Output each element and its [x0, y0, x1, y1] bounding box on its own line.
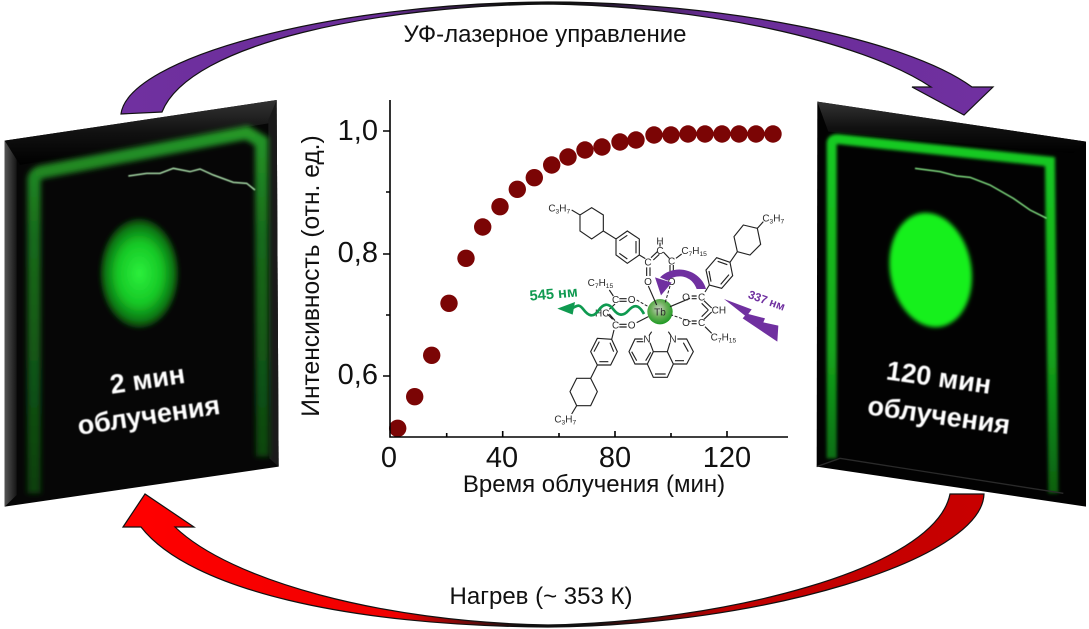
- atom labels: H: [599, 278, 606, 289]
- atom labels: 15: [699, 251, 707, 258]
- x axis title: Время облучения (мин): [463, 471, 725, 498]
- atom labels: O: [682, 293, 690, 304]
- atom labels: C: [548, 203, 556, 214]
- atom labels: 3: [770, 219, 774, 226]
- atom labels: 7: [780, 219, 784, 226]
- atom labels: H: [773, 214, 780, 225]
- atom labels: [548, 203, 784, 426]
- atom labels: 3: [562, 419, 566, 426]
- caption: облучения: [866, 390, 1012, 440]
- crack: [128, 168, 255, 190]
- arrow: purple UV laser arrow: [121, 2, 993, 115]
- glowing spot: [881, 206, 981, 334]
- atom labels: 7: [689, 251, 693, 258]
- atom labels: O: [628, 295, 636, 306]
- atom labels: O: [682, 318, 690, 329]
- Tb atom: [647, 299, 673, 324]
- atom labels: C: [698, 318, 705, 329]
- arrow: red heating arrow: [123, 494, 984, 627]
- y tick labels: 0,8: [338, 237, 378, 269]
- atom labels: 7: [572, 419, 576, 426]
- atom labels: N: [643, 334, 651, 345]
- y tick labels: [338, 115, 378, 391]
- panel: sample after 120 minutes: [817, 102, 1086, 507]
- atom labels: C: [656, 246, 664, 257]
- atom labels: 7: [595, 283, 599, 290]
- atom labels: 7: [566, 208, 570, 215]
- y tick labels: 1,0: [338, 115, 378, 147]
- x tick labels: [381, 442, 751, 474]
- caption: [75, 359, 222, 441]
- atom labels: C: [644, 258, 652, 269]
- atom labels: Tb: [654, 307, 666, 318]
- x tick labels: 80: [599, 442, 631, 474]
- atom labels: CH: [712, 306, 726, 317]
- atom labels: H: [692, 246, 699, 257]
- atom labels: C: [681, 246, 689, 257]
- emission wave arrow: [557, 302, 644, 315]
- atom labels: 7: [718, 338, 722, 345]
- atom labels: H: [565, 414, 572, 425]
- atom labels: H: [656, 237, 664, 248]
- atom labels: C: [554, 414, 562, 425]
- bonds: [570, 208, 763, 414]
- caption: [866, 355, 1012, 440]
- atom labels: N: [669, 334, 677, 345]
- atom labels: O: [644, 277, 652, 288]
- atom labels: C: [668, 256, 675, 267]
- caption: 120 мин: [885, 355, 993, 400]
- atom labels: C: [612, 295, 619, 306]
- atom labels: 15: [606, 283, 614, 290]
- chart: intensity vs time: [298, 100, 788, 498]
- atom labels: C: [711, 333, 718, 344]
- excitation curved arrow: [655, 270, 706, 295]
- atom labels: O: [628, 321, 636, 332]
- atom labels: C: [588, 278, 595, 289]
- atom labels: 3: [556, 208, 560, 215]
- x tick labels: 40: [486, 442, 518, 474]
- atom labels: C: [698, 293, 705, 304]
- laser bolt: [724, 299, 778, 342]
- x tick labels: 0: [381, 442, 397, 474]
- y axis title: Интенсивность (отн. ед.): [298, 135, 325, 417]
- atom labels: H: [722, 333, 729, 344]
- axes: [383, 100, 788, 437]
- caption: 2 мин: [108, 359, 187, 400]
- panel: sample after 2 minutes: [5, 100, 279, 507]
- 337 nm label: 337 нм: [746, 288, 787, 314]
- atom labels: C: [762, 214, 770, 225]
- text: heating label: Нагрев (~ 353 К): [450, 583, 632, 610]
- x tick labels: 120: [703, 442, 751, 474]
- atom labels: C: [612, 321, 619, 332]
- atom labels: O: [668, 277, 676, 288]
- atom labels: H: [559, 203, 566, 214]
- atom labels: 15: [729, 338, 737, 345]
- y tick labels: 0,6: [338, 359, 378, 391]
- data points: [389, 125, 782, 437]
- glowing spot: [100, 218, 179, 328]
- caption: облучения: [75, 390, 222, 441]
- atom labels: HC: [595, 308, 609, 319]
- crack: [915, 168, 1047, 218]
- coordination bonds: [637, 286, 691, 322]
- text: UV label: УФ-лазерное управление: [403, 21, 687, 48]
- 545 nm label: 545 нм: [529, 285, 578, 305]
- diagram: Tb complex molecule: [529, 203, 787, 426]
